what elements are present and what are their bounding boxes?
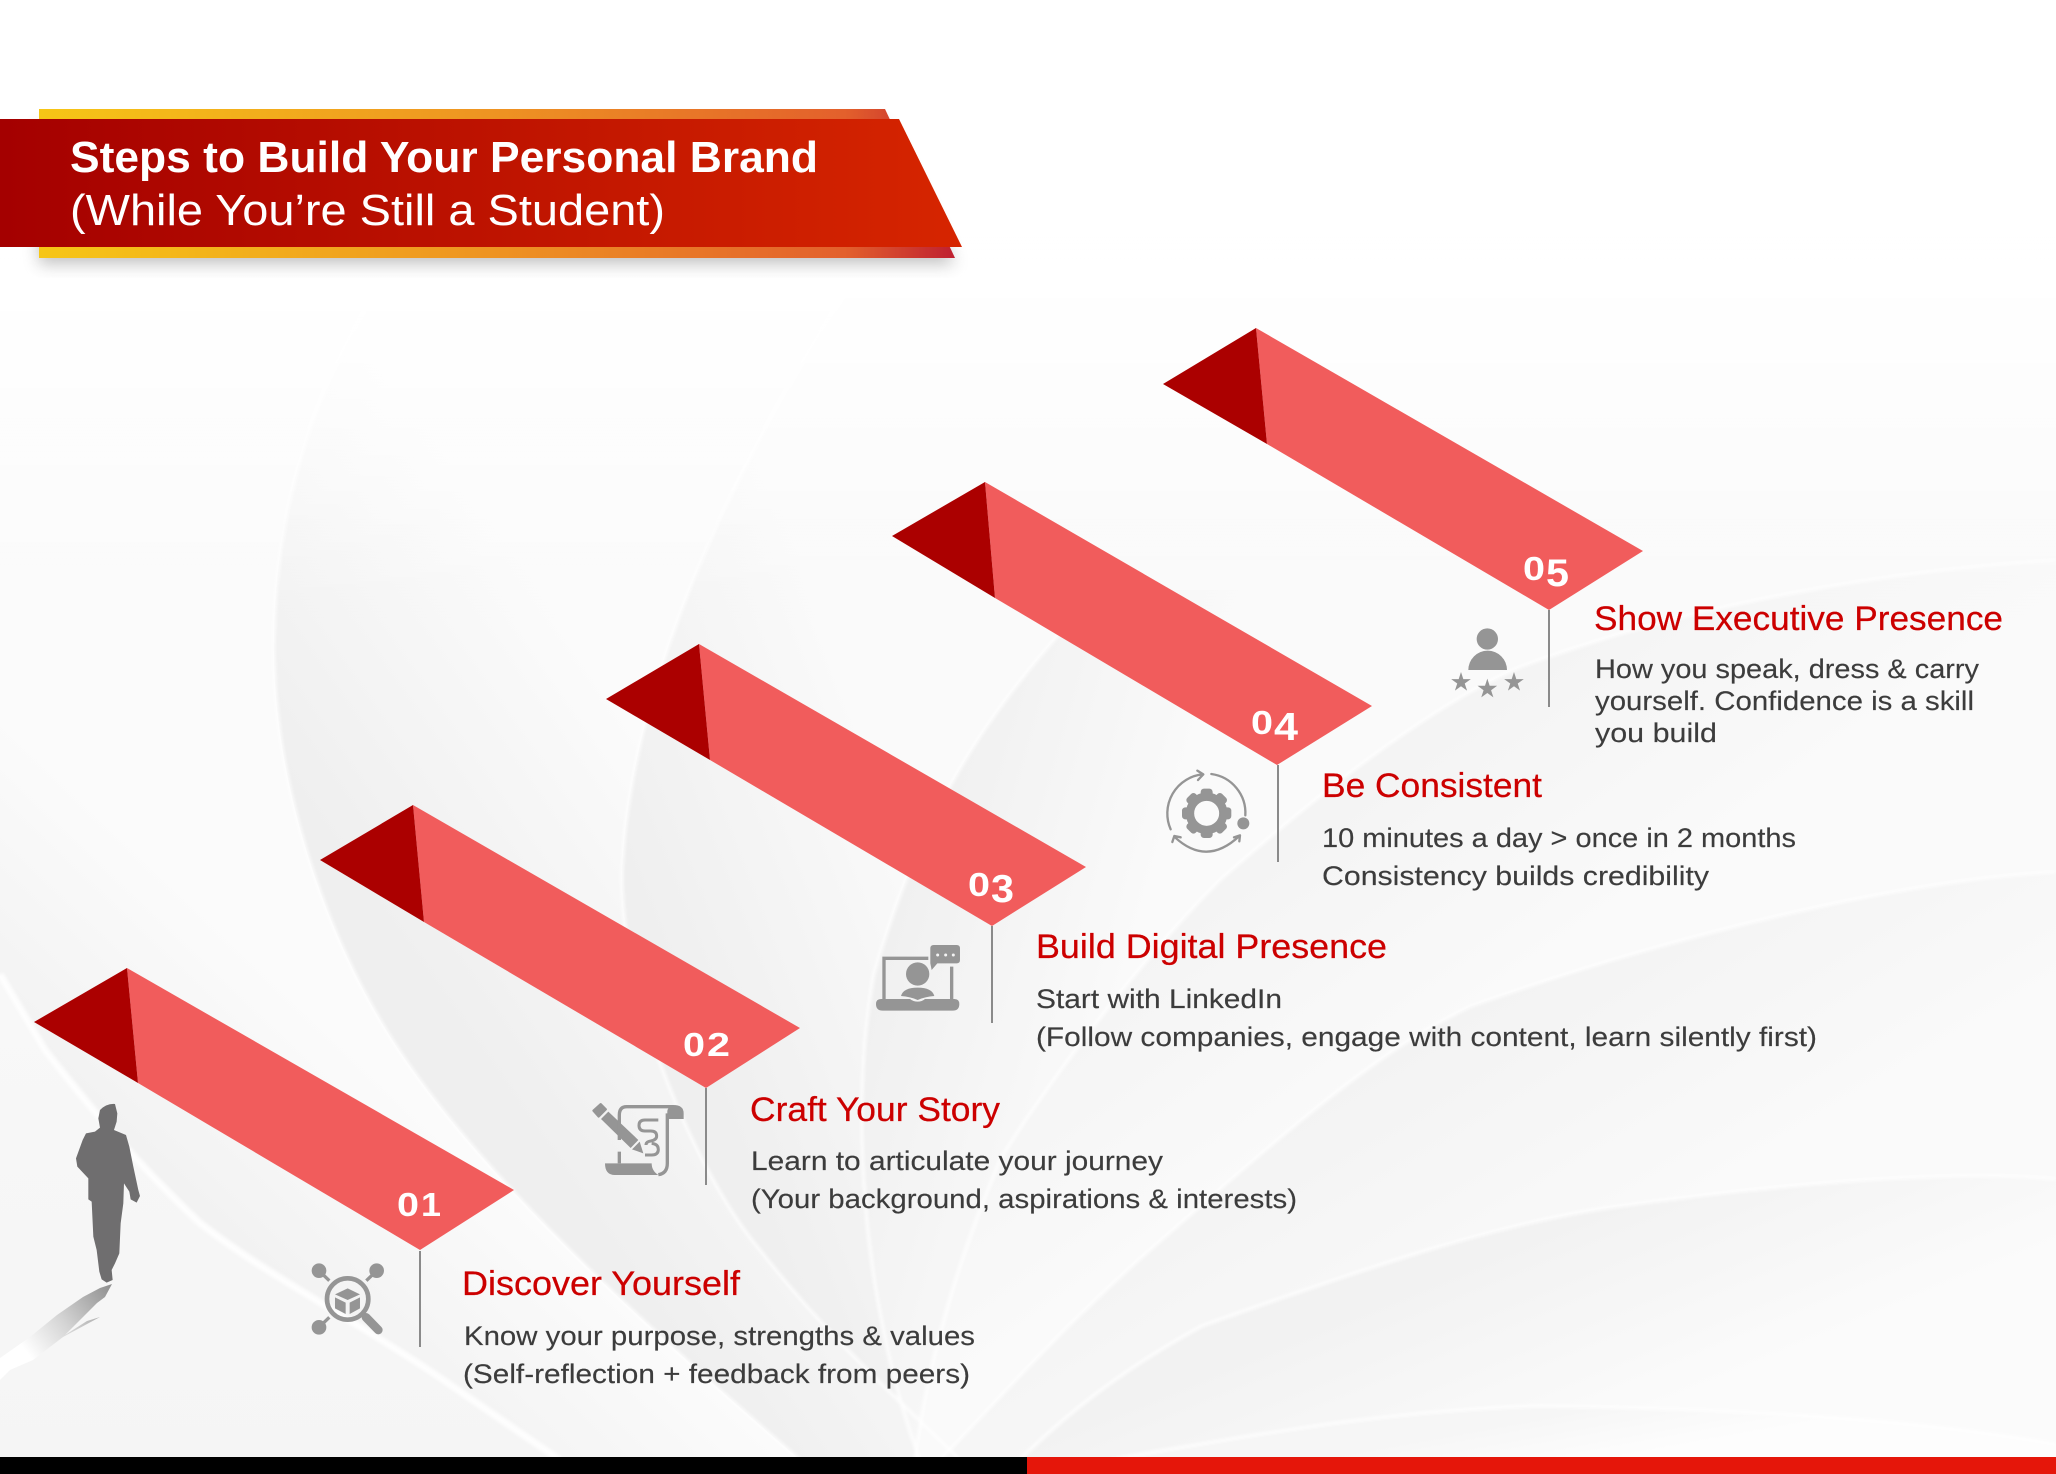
step 5 text: you build [1595,718,1717,748]
icon: laptop with person and chat [876,945,960,1011]
step 3 text: Build Digital Presence [1036,928,1387,966]
step 2 stair: 0 [683,1026,705,1063]
step 5 text: How you speak, dress & carry [1595,654,1980,684]
divider 3 [991,926,993,1023]
step 1 text: Discover Yourself [462,1265,741,1303]
step 5 text: Show Executive Presence [1594,600,2003,638]
subtitle text: (While You’re Still a Student) [70,186,665,235]
step 5 text [1594,600,2003,748]
step 4 stair [892,482,1372,765]
banner red front layer [0,119,962,247]
step 3 stair: 3 [991,868,1014,911]
step 3 text [1036,928,1817,1052]
step 3 text: (Follow companies, engage with content, learn silently first) [1036,1022,1817,1052]
walking person silhouette [76,1104,140,1283]
step 1 stair: 1 [421,1186,441,1223]
step 1 text: Know your purpose, strengths & values [464,1321,975,1351]
step 1 stair: 0 [397,1186,419,1223]
bottom bar [0,1457,2056,1474]
person shadow [0,1284,112,1380]
divider 2 [705,1088,707,1185]
step 5 text: yourself. Confidence is a skill [1595,686,1974,716]
divider 4 [1277,765,1279,862]
step 5 stair: 0 [1523,550,1545,587]
step 2 text: (Your background, aspirations & interests) [751,1184,1297,1214]
step 4 stair: 0 [1251,704,1273,741]
banner shadow [39,126,955,264]
icon: pencil and scroll [593,1104,682,1175]
title text: Steps to Build Your Personal Brand [70,133,818,182]
step 1 text: (Self-reflection + feedback from peers) [463,1359,970,1389]
icon: person with three stars [1451,628,1524,697]
step 1 stair [34,968,514,1250]
step 2 stair: 2 [707,1026,730,1063]
step 4 stair: 4 [1274,706,1298,749]
step 3 stair: 0 [968,866,990,903]
banner gold back layer [39,109,955,258]
step 5 stair [1163,328,1643,610]
step 4 text: Be Consistent [1322,767,1543,805]
step 2 text: Learn to articulate your journey [751,1146,1164,1176]
step 5 stair: 5 [1546,552,1569,595]
step 2 text: Craft Your Story [750,1091,1000,1129]
step 1 text [462,1265,975,1389]
step 4 text [1322,767,1796,891]
step 3 text: Start with LinkedIn [1036,984,1282,1014]
divider 1 [419,1251,421,1347]
step 4 text: 10 minutes a day > once in 2 months [1322,823,1796,853]
icon: magnifier with cube [312,1263,384,1335]
title banner [0,109,962,264]
step 4 text: Consistency builds credibility [1322,861,1710,891]
step 3 stair [606,644,1086,926]
step 2 stair [320,805,800,1088]
divider 5 [1548,610,1550,707]
icon: gear with cycle arrows [1167,771,1249,852]
step 2 text [750,1091,1297,1214]
